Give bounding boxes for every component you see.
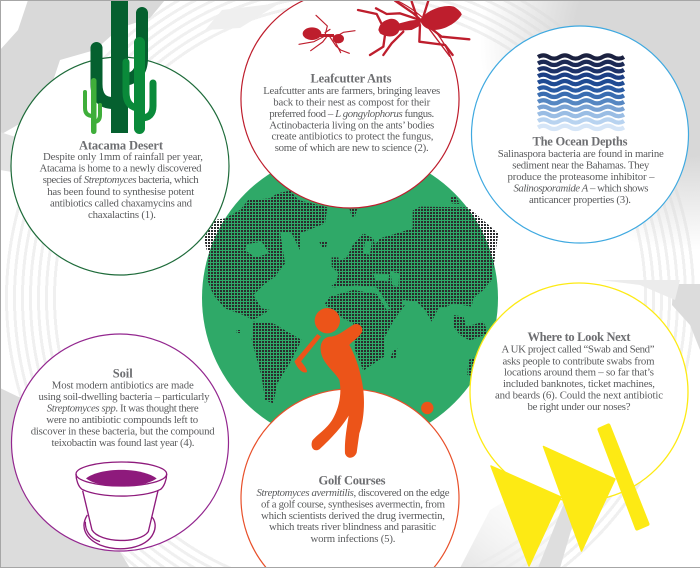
heading: Golf Courses: Golf Courses <box>318 473 386 487</box>
text: Atacama Desert body: Despite only 1mm of rainfall per year, <box>43 151 203 163</box>
text: Atacama Desert body: antibiotics called chaxamycins and <box>50 197 193 209</box>
text: Soil body: Most modern antibiotics are made <box>52 379 194 391</box>
text: Atacama Desert body: species of Streptomyces bacteria, which <box>43 174 199 186</box>
text: Golf Courses body: of a golf course, synthesises avermectin, from <box>261 498 446 510</box>
text: Atacama Desert body: has been found to synthesise potent <box>47 186 194 198</box>
text: Leafcutter Ants body: preferred food – L gongylophorus fungus. <box>269 108 434 120</box>
icon: golf ball <box>421 402 433 414</box>
text: Where to Look Next body: A UK project called “Swab and Send” <box>502 344 655 356</box>
panel: Leafcutter Ants <box>241 0 469 208</box>
icon: yellow fast-forward shapes <box>491 426 648 566</box>
text: Atacama Desert body: Atacama is home to a newly discovered <box>40 163 202 175</box>
text: Golf Courses body <box>256 487 450 545</box>
text: Where to Look Next body: and beards (6). Could the next antibiotic <box>495 390 663 402</box>
text: Golf Courses body: which scientists derived the drug ivermectin, <box>261 510 445 522</box>
panel: Golf Courses <box>241 389 459 568</box>
text: Soil body: using soil-dwelling bacteria – particularly <box>38 391 210 403</box>
text: Leafcutter Ants body: Actinobacteria living on the ants’ bodies <box>269 119 434 131</box>
panel: Soil <box>12 334 228 551</box>
dotted world map <box>204 191 498 403</box>
heading: Soil: Soil <box>113 366 133 380</box>
text: Where to Look Next body: be right under our noses? <box>528 401 631 413</box>
text: The Ocean Depths body: sediment near the Bahamas. They <box>512 160 650 172</box>
panel: The Ocean Depths <box>472 26 688 243</box>
text: The Ocean Depths body <box>498 148 664 206</box>
globe <box>202 150 498 446</box>
heading: Where to Look Next: Where to Look Next <box>528 330 631 344</box>
text: Soil body: Streptomyces spp. It was thought there <box>47 402 199 414</box>
heading: The Ocean Depths: The Ocean Depths <box>532 135 628 149</box>
text: Leafcutter Ants body: some of which are new to science (2). <box>275 142 429 154</box>
text: Where to Look Next body: asks people to contribute swabs from <box>502 356 655 368</box>
text: Where to Look Next body: included banknotes, ticket machines, <box>503 378 655 390</box>
text: Soil body: teixobactin was found last year (4). <box>52 437 194 449</box>
icon: plant pot with soil <box>76 462 167 549</box>
icon: cacti <box>85 0 153 134</box>
text: Soil body <box>31 379 215 449</box>
text: Atacama Desert body <box>40 151 203 221</box>
text: The Ocean Depths body: produce the proteasome inhibitor – <box>508 171 655 183</box>
text: Golf Courses body: which treats river blindness and parasitic <box>269 521 436 533</box>
text: The Ocean Depths body: anticancer properties (3). <box>529 194 631 206</box>
text: Soil body: were no antibiotic compounds left to <box>46 414 198 426</box>
text: Where to Look Next body: locations around them – so far that’s <box>504 367 654 379</box>
text: Leafcutter Ants body: create antibiotics to protect the fungus, <box>272 131 434 143</box>
panel: Atacama Desert <box>11 0 229 275</box>
text: Leafcutter Ants body: Leafcutter ants are farmers, bringing leaves <box>263 85 440 97</box>
text: Golf Courses body: worm infections (5). <box>310 533 396 545</box>
text: Leafcutter Ants body <box>263 85 440 154</box>
heading: Atacama Desert: Atacama Desert <box>79 138 164 152</box>
text: Leafcutter Ants body: back to their nest as compost for their <box>273 96 431 108</box>
panel: Where to Look Next <box>470 283 688 566</box>
text: The Ocean Depths body: Salinosporamide A – which shows <box>514 182 648 194</box>
text: The Ocean Depths body: Salinaspora bacteria are found in marine <box>498 148 664 160</box>
icon: orange golfer <box>294 308 364 458</box>
text: Atacama Desert body: chaxalactins (1). <box>88 209 156 221</box>
icon: ocean waves <box>538 55 624 129</box>
text: Soil body: discover in these bacteria, but the compound <box>31 426 215 438</box>
text: Where to Look Next body <box>495 344 663 413</box>
icon: leafcutter ants <box>299 1 469 57</box>
text: Golf Courses body: Streptomyces avermitilis, discovered on the edge <box>256 487 450 499</box>
heading: Leafcutter Ants: Leafcutter Ants <box>310 72 392 86</box>
